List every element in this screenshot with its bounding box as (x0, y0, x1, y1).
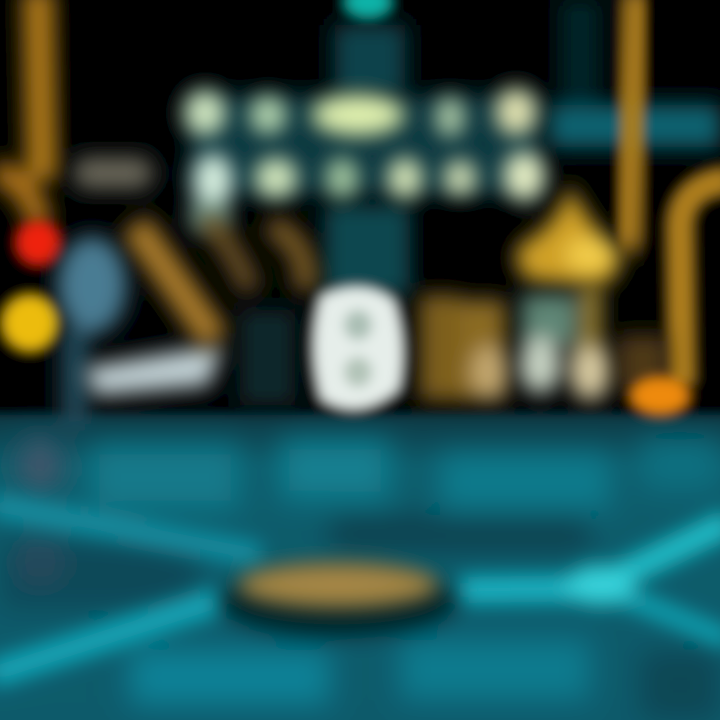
orange blob (630, 377, 690, 415)
gold bell (517, 185, 620, 285)
right gold arch (680, 180, 720, 385)
left gold column (0, 0, 42, 225)
white slanted shape (85, 345, 222, 395)
pale blob rows (185, 89, 544, 230)
teal panel (190, 95, 540, 195)
right teal band (550, 0, 720, 147)
gold slanted bar (135, 225, 215, 340)
gray pill (74, 158, 152, 188)
middle gold shapes (205, 215, 306, 290)
white B shape (312, 286, 404, 410)
right gold vertical bar (626, 0, 638, 250)
pale lantern base (520, 285, 610, 400)
brown base (618, 335, 668, 390)
dark block (425, 210, 510, 280)
floor (0, 415, 720, 720)
central teal tower (240, 25, 410, 405)
blue-gray figure (58, 237, 126, 430)
top teal beacon (344, 0, 392, 18)
yellow dot (2, 295, 58, 351)
gold columns (420, 295, 508, 400)
gold disc on floor (220, 563, 456, 636)
red dot (16, 221, 60, 265)
floor light lines (0, 505, 720, 675)
